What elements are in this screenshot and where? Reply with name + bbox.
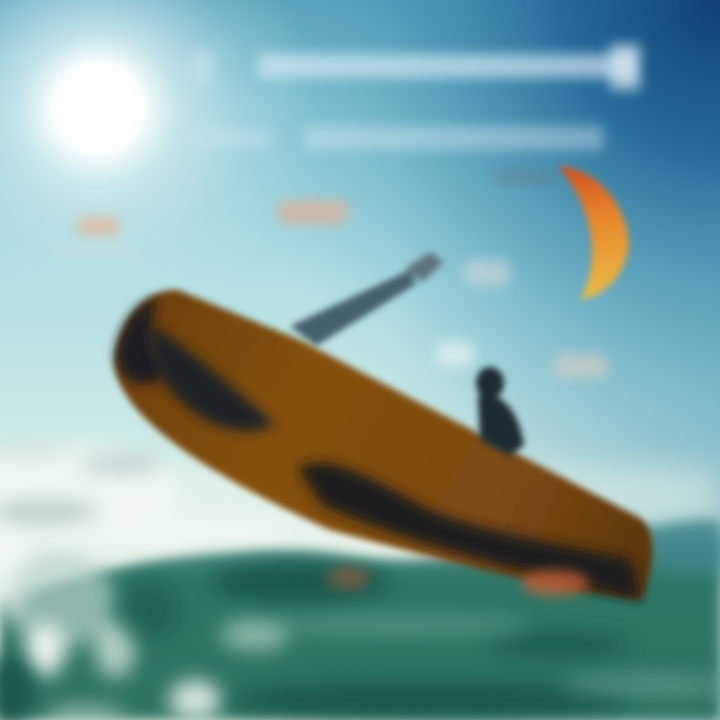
board dark nose	[116, 298, 168, 384]
rider silhouette	[476, 367, 524, 456]
board	[114, 290, 652, 600]
kite label	[496, 170, 556, 184]
sea foam	[0, 441, 290, 720]
callout: centre label	[278, 200, 348, 224]
pale wave highlights	[270, 528, 720, 695]
callout: left label	[54, 216, 142, 258]
kite	[496, 166, 628, 300]
board dark stripe	[298, 463, 640, 600]
heading: blurred title	[192, 44, 640, 150]
horizon haze	[0, 470, 720, 520]
callout: right labels	[436, 260, 608, 378]
mast	[290, 252, 444, 346]
sea	[0, 441, 720, 720]
sun	[0, 0, 500, 400]
fins	[326, 566, 589, 596]
dark waves	[0, 562, 630, 720]
